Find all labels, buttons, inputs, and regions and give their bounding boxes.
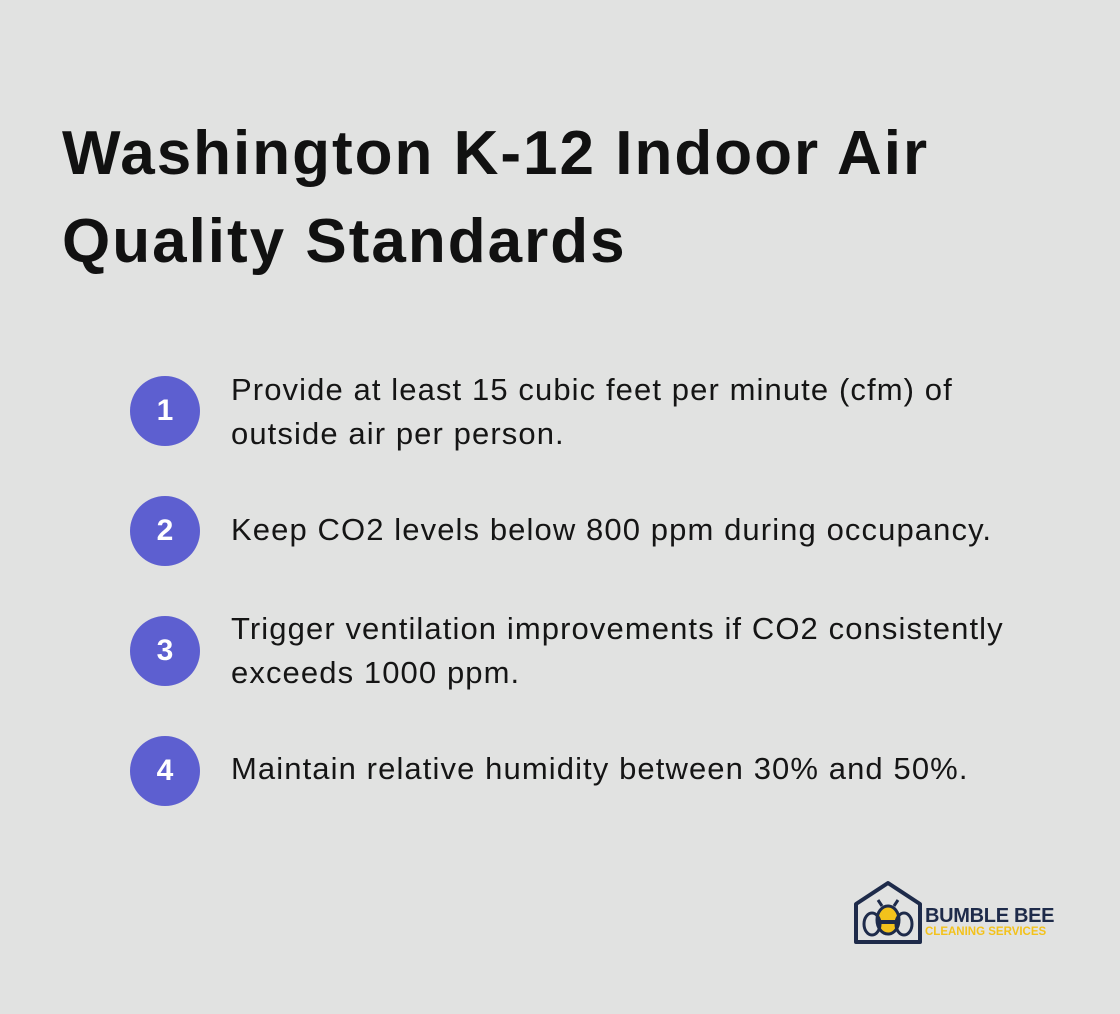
item 1 (130, 372, 953, 451)
text 3: exceeds 1000 ppm. (231, 655, 520, 690)
badge 2 (130, 496, 200, 566)
badge 1 (130, 376, 200, 446)
title: Quality Standards (62, 207, 627, 276)
badge 4 (130, 736, 200, 806)
logo (854, 881, 1054, 944)
text 1: Provide at least 15 cubic feet per minute (cfm) of (231, 372, 953, 407)
title (62, 119, 929, 276)
title: Washington K-12 Indoor Air (62, 119, 929, 188)
badge 3: 3 (157, 634, 173, 667)
badge 4: 4 (157, 754, 173, 787)
item 2 (130, 496, 992, 566)
item 4 (130, 736, 969, 806)
icon: bee house (854, 881, 922, 944)
text 4: Maintain relative humidity between 30% and 50%. (231, 751, 969, 786)
text 3 (231, 611, 1004, 690)
text 1 (231, 372, 953, 451)
badge 3 (130, 616, 200, 686)
logo text: BUMBLE BEE (925, 905, 1054, 927)
text 1: outside air per person. (231, 416, 565, 451)
text 3: Trigger ventilation improvements if CO2 consistently (231, 611, 1004, 646)
text 2: Keep CO2 levels below 800 ppm during occupancy. (231, 512, 992, 547)
logo: CLEANING SERVICES (925, 926, 1046, 938)
badge 1: 1 (157, 394, 173, 427)
item 3 (130, 611, 1004, 690)
badge 2: 2 (157, 514, 173, 547)
